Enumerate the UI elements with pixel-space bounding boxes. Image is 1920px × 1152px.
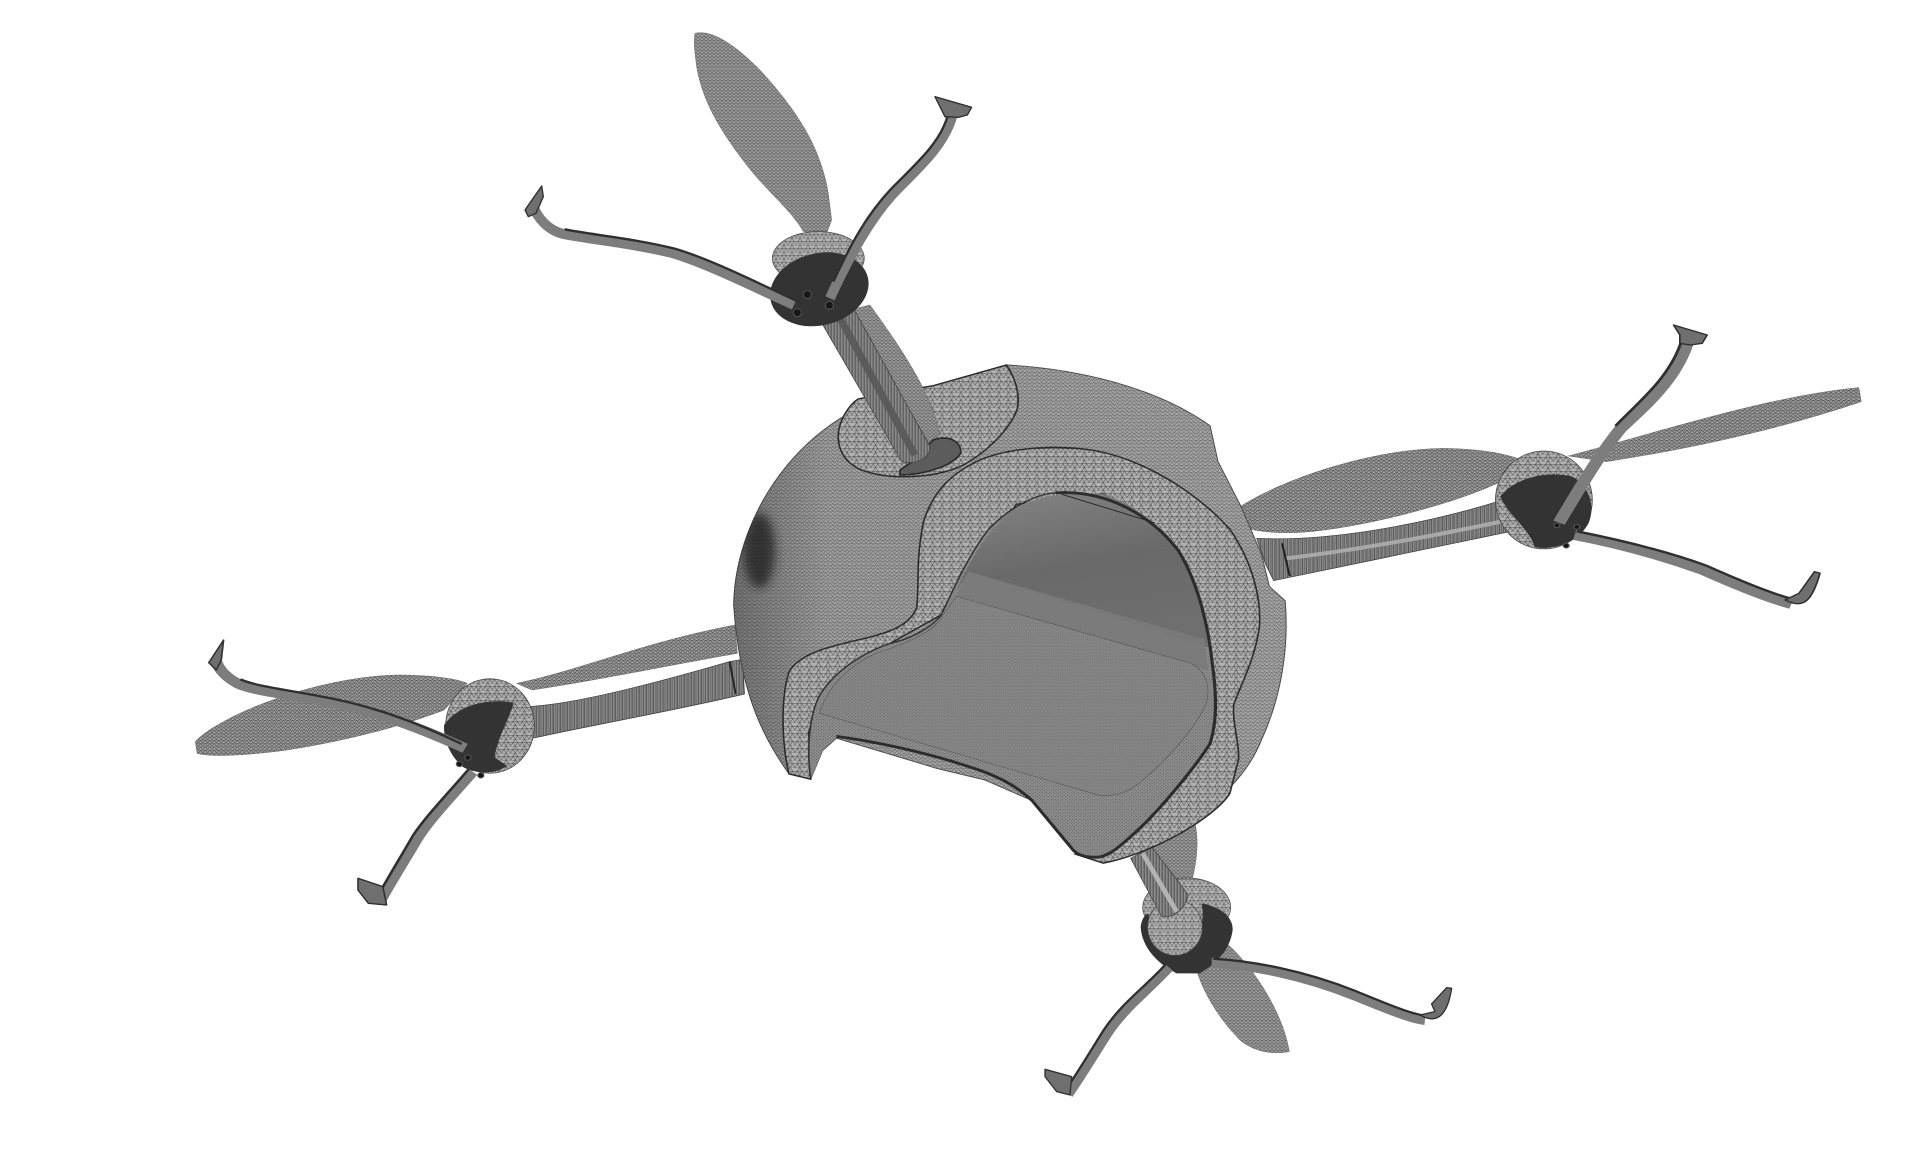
landing leg: left, lower <box>358 769 473 905</box>
left propeller arm assembly <box>195 625 744 905</box>
bottom propeller arm assembly <box>1045 820 1452 1095</box>
front rim band <box>783 447 1260 863</box>
landing leg: bottom, left <box>1045 964 1169 1095</box>
propeller blade: bottom arm, rear <box>1150 820 1197 885</box>
floor panel <box>819 596 1208 796</box>
arm collar line: left <box>730 662 736 694</box>
propeller blade: left arm, rear <box>517 625 737 690</box>
cabin opening <box>809 493 1216 857</box>
propeller blade: right arm, outer <box>1568 388 1861 462</box>
landing leg: bottom, right <box>1212 959 1452 1020</box>
right propeller arm assembly <box>1240 325 1861 604</box>
top propeller arm assembly <box>525 33 972 475</box>
drone body shell <box>724 354 1297 872</box>
landing leg: top, left <box>525 186 796 305</box>
propeller blade: bottom arm, front <box>1197 943 1289 1053</box>
arm tube: top <box>820 305 930 462</box>
motor hub: top <box>762 232 877 336</box>
propeller blade: top, rear <box>850 305 940 445</box>
propeller blade: left arm, outer <box>195 675 467 756</box>
landing leg: left, upper <box>209 640 465 748</box>
landing leg: top, right <box>830 97 972 298</box>
motor hub: bottom <box>1141 878 1233 973</box>
camera recess swirl <box>743 513 775 588</box>
propeller blade: right arm, rear <box>1240 448 1520 533</box>
arm stripe: right <box>1286 522 1501 558</box>
landing leg: right, upper <box>1559 325 1707 523</box>
motor base collar <box>900 438 961 475</box>
motor hub: right <box>1495 451 1592 549</box>
shell outline <box>734 365 1286 863</box>
top arm mounting patch <box>838 365 1018 477</box>
cabin rear wall <box>957 493 1208 647</box>
shell shading <box>734 366 1102 796</box>
opening front edge <box>809 493 1056 779</box>
propeller blade: top <box>694 33 832 232</box>
seat back stripe <box>956 571 1208 670</box>
cabin back edge line <box>1062 494 1155 523</box>
landing leg: right, lower <box>1575 531 1820 604</box>
opening thick edge <box>836 493 1216 857</box>
arm tube: bottom <box>1131 847 1188 917</box>
floor panel texture <box>819 596 1208 796</box>
arm tube: right <box>1257 500 1518 581</box>
arm collar line: right <box>1282 543 1290 576</box>
arm tube: left <box>526 659 744 738</box>
motor hub: left <box>444 679 534 778</box>
